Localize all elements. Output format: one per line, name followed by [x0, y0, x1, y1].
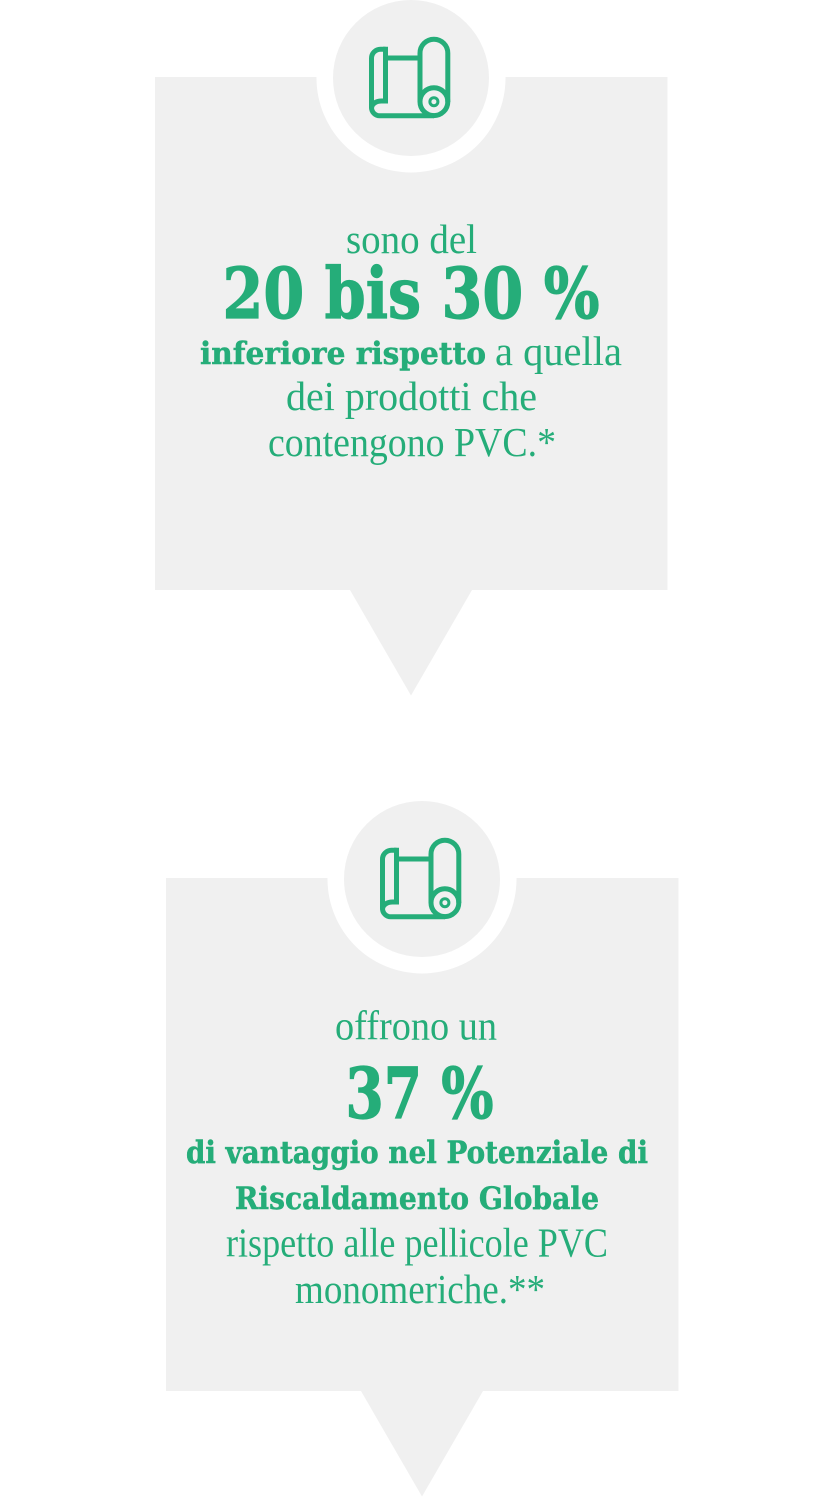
text: description: Riscaldamento Globale	[235, 1181, 599, 1217]
heading: 20 bis 30 %: 20 bis 30 %	[222, 252, 600, 335]
text: intro line: sono del	[346, 216, 477, 262]
text: description: rispetto alle pellicole PVC	[226, 1220, 608, 1266]
text: intro line: offrono un	[335, 1002, 497, 1048]
text: description: inferiore rispetto	[200, 336, 486, 372]
text: description: a quella	[495, 328, 622, 374]
icon badge circle	[344, 801, 500, 957]
text: description: contengono PVC.*	[268, 419, 556, 465]
text: description: dei prodotti che	[286, 373, 537, 419]
icon badge circle	[333, 0, 489, 156]
panel: top callout	[155, 0, 668, 696]
white ring behind icon	[328, 784, 516, 974]
white ring behind icon	[316, 0, 506, 172]
panel: bottom callout	[166, 784, 678, 1496]
callout box with pointer	[166, 878, 678, 1496]
text: description: di vantaggio nel Potenziale di	[186, 1135, 648, 1171]
text: description: monomeriche.**	[295, 1266, 545, 1312]
text: description	[186, 1135, 648, 1312]
icon: material roll	[372, 39, 448, 116]
callout box with pointer	[155, 77, 668, 696]
heading: 37 %: 37 %	[346, 1052, 494, 1135]
text: description	[200, 328, 622, 465]
icon: material roll	[382, 840, 459, 917]
